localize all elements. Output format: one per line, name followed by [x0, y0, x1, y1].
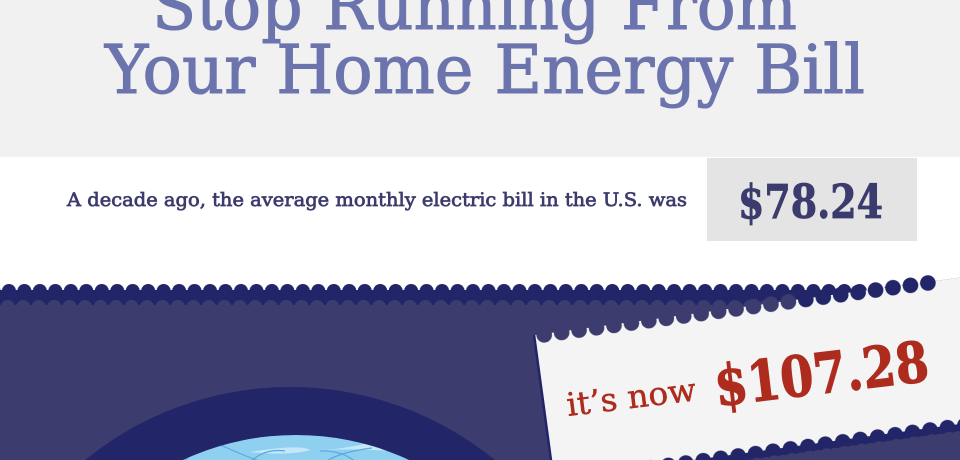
title: Your Home Energy Bill [104, 31, 865, 109]
header panel [0, 0, 960, 157]
ticket: current bill [532, 264, 960, 460]
price box: past bill: $78.24 [738, 175, 883, 230]
ticket text: it's now: it’s now [564, 370, 698, 424]
globe illustration [86, 387, 494, 460]
price box: past bill [707, 158, 917, 241]
dark panel with scalloped edge [0, 284, 960, 460]
intro sentence: A decade ago, the average monthly electric bill in the U.S. was [66, 189, 687, 211]
